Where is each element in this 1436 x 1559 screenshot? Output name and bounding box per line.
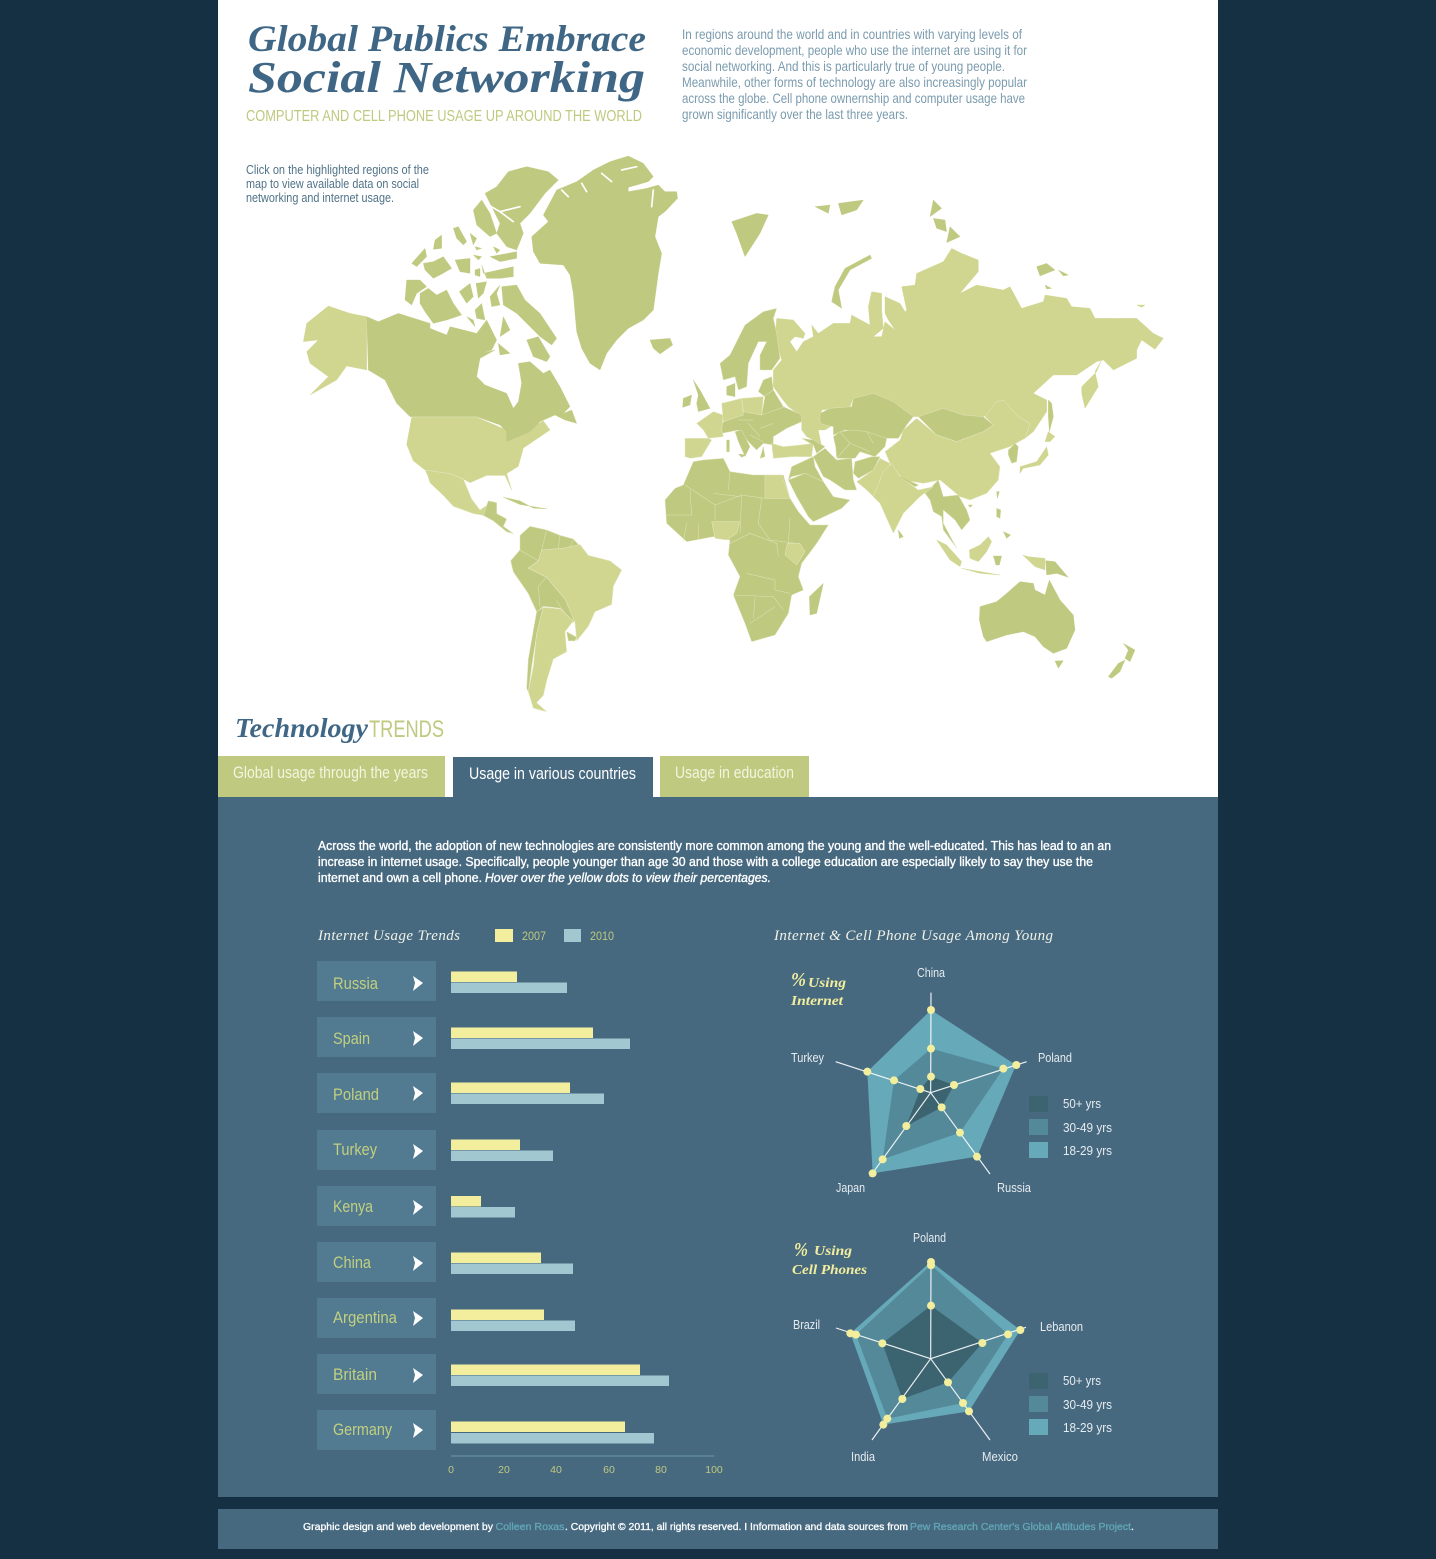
radar chart: percent using cell phones xyxy=(792,1230,1112,1464)
radar title: Using xyxy=(808,975,846,990)
section heading: Technology Trends xyxy=(235,713,444,743)
bar chart axis: 0 xyxy=(448,1464,454,1476)
map: United States, Latin America xyxy=(407,417,622,712)
row: Britain: Britain xyxy=(333,1365,377,1384)
row: Turkey xyxy=(317,1130,553,1170)
footer: Colleen Roxas xyxy=(496,1521,564,1533)
tab: Usage in various countries xyxy=(453,757,653,797)
bar chart legend xyxy=(495,929,614,943)
row: Britain xyxy=(317,1354,669,1394)
tab: Usage in education: Usage in education xyxy=(675,764,794,782)
radar legend: 18-29 yrs xyxy=(1063,1420,1112,1435)
radar axis labels: Turkey xyxy=(791,1050,824,1065)
section heading: Technology Trends: Technology xyxy=(235,713,369,743)
radar title: Cell Phones xyxy=(792,1262,867,1277)
bar chart axis: 20 xyxy=(498,1464,510,1476)
radar title: Using xyxy=(814,1243,852,1258)
bar chart axis: 100 xyxy=(705,1464,723,1476)
row: Turkey: Turkey xyxy=(333,1140,377,1159)
radar axis labels: Russia xyxy=(997,1180,1032,1195)
bar chart heading: Internet Usage Trends xyxy=(317,928,460,944)
row: Poland: Poland xyxy=(333,1085,379,1104)
row: Argentina: Argentina xyxy=(333,1308,397,1327)
map: Canada, Alaska, Greenland, Iceland xyxy=(303,156,678,442)
map: China, East and South-East Asia, Oceania xyxy=(885,400,1135,678)
radar plot xyxy=(836,993,1027,1177)
radar axis labels: China xyxy=(917,965,946,980)
radar legend xyxy=(1029,1373,1112,1435)
section heading: Technology Trends: TRENDS xyxy=(369,716,444,743)
radar axis labels: Mexico xyxy=(982,1449,1018,1464)
map: Africa, Madagascar, Svalbard xyxy=(665,213,828,642)
radar legend: 18-29 yrs xyxy=(1063,1143,1112,1158)
radar axis labels xyxy=(791,965,1072,1195)
radar axis labels: Poland xyxy=(1038,1050,1072,1065)
footer: . Copyright © 2011, all rights reserved. I Information and data sources from xyxy=(565,1521,908,1533)
radar title xyxy=(790,969,846,1008)
radar chart: percent using internet xyxy=(790,965,1112,1195)
intro text: Meanwhile, other forms of technology are also increasingly popular xyxy=(682,74,1027,90)
intro text: grown significantly over the last three years. xyxy=(682,106,908,122)
row: China xyxy=(317,1242,573,1282)
row: Russia xyxy=(317,961,567,1001)
row: Spain xyxy=(317,1017,630,1057)
title xyxy=(248,19,646,102)
row: Poland xyxy=(317,1073,604,1113)
bar chart: internet usage trends xyxy=(317,961,723,1476)
title: Social Networking xyxy=(248,53,645,102)
radar plot xyxy=(836,1258,1026,1440)
row: Germany xyxy=(317,1410,654,1450)
radar axis labels: Japan xyxy=(836,1180,865,1195)
footer: Pew Research Center's Global Attitudes Project xyxy=(910,1521,1131,1533)
tab: Global usage through the years xyxy=(218,756,445,797)
radar axis labels: Lebanon xyxy=(1040,1319,1083,1334)
map: Europe, Middle East, South Asia xyxy=(683,308,933,533)
radar legend: 30-49 yrs xyxy=(1063,1397,1112,1412)
footer xyxy=(218,1509,1218,1549)
intro text: social networking. And this is particularly true of young people. xyxy=(682,58,1005,74)
panel intro text: Hover over the yellow dots to view their percentages. xyxy=(485,871,771,885)
bar chart legend: 2010 xyxy=(590,931,614,943)
radar title: Internet xyxy=(790,993,844,1008)
tab: Usage in various countries: Usage in various countries xyxy=(469,765,636,783)
bar chart axis: 80 xyxy=(655,1464,667,1476)
world map xyxy=(303,156,1163,712)
row: Germany: Germany xyxy=(333,1420,392,1439)
radar axis labels xyxy=(793,1230,1083,1464)
intro text: across the globe. Cell phone ownernship and computer usage have xyxy=(682,90,1025,106)
radar title: % xyxy=(791,969,806,991)
radar title xyxy=(792,1239,867,1277)
radar section heading: Internet & Cell Phone Usage Among Young xyxy=(773,928,1054,944)
map instructions: map to view available data on social xyxy=(246,176,419,191)
map instructions: networking and internet usage. xyxy=(246,190,394,205)
row: Kenya xyxy=(317,1186,515,1226)
radar title: % xyxy=(794,1239,808,1261)
intro text xyxy=(682,26,1027,122)
title: Global Publics Embrace xyxy=(248,19,646,60)
footer: Graphic design and web development by xyxy=(303,1521,494,1533)
radar axis labels: Brazil xyxy=(793,1317,820,1332)
map instructions xyxy=(246,162,429,205)
radar legend: 50+ yrs xyxy=(1063,1096,1101,1111)
panel intro text: internet and own a cell phone. xyxy=(318,871,482,885)
radar legend: 50+ yrs xyxy=(1063,1373,1101,1388)
row: China: China xyxy=(333,1253,371,1272)
bar chart axis: 60 xyxy=(603,1464,615,1476)
panel: usage in various countries xyxy=(218,797,1218,1497)
intro text: In regions around the world and in countries with varying levels of xyxy=(682,26,1022,42)
bar chart axis: 40 xyxy=(550,1464,562,1476)
radar legend xyxy=(1029,1096,1112,1158)
tab: Usage in education xyxy=(660,756,809,797)
intro text: economic development, people who use the internet are using it for xyxy=(682,42,1027,58)
row: Spain: Spain xyxy=(333,1029,370,1048)
radar axis labels: India xyxy=(851,1449,876,1464)
map: Russia, Kazakhstan, Mongolia, northern islands xyxy=(773,200,1163,447)
panel intro text: increase in internet usage. Specifically, people younger than age 30 and those with a college education are especially likely to say they use the xyxy=(318,855,1093,869)
tab: Global usage through the years: Global usage through the years xyxy=(233,764,428,782)
row: Kenya: Kenya xyxy=(333,1197,373,1216)
panel intro text: Across the world, the adoption of new technologies are consistently more common among the young and the well-educated. This has lead to an an xyxy=(318,839,1111,853)
row: Argentina xyxy=(317,1298,575,1338)
radar axis labels: Poland xyxy=(913,1230,946,1245)
subtitle: COMPUTER AND CELL PHONE USAGE UP AROUND THE WORLD xyxy=(246,108,642,125)
map instructions: Click on the highlighted regions of the xyxy=(246,162,429,177)
footer: . xyxy=(1131,1521,1134,1533)
row: Russia: Russia xyxy=(333,974,378,993)
bar chart legend: 2007 xyxy=(522,931,546,943)
radar legend: 30-49 yrs xyxy=(1063,1120,1112,1135)
bar chart axis xyxy=(448,1456,723,1476)
panel intro text xyxy=(318,839,1111,885)
